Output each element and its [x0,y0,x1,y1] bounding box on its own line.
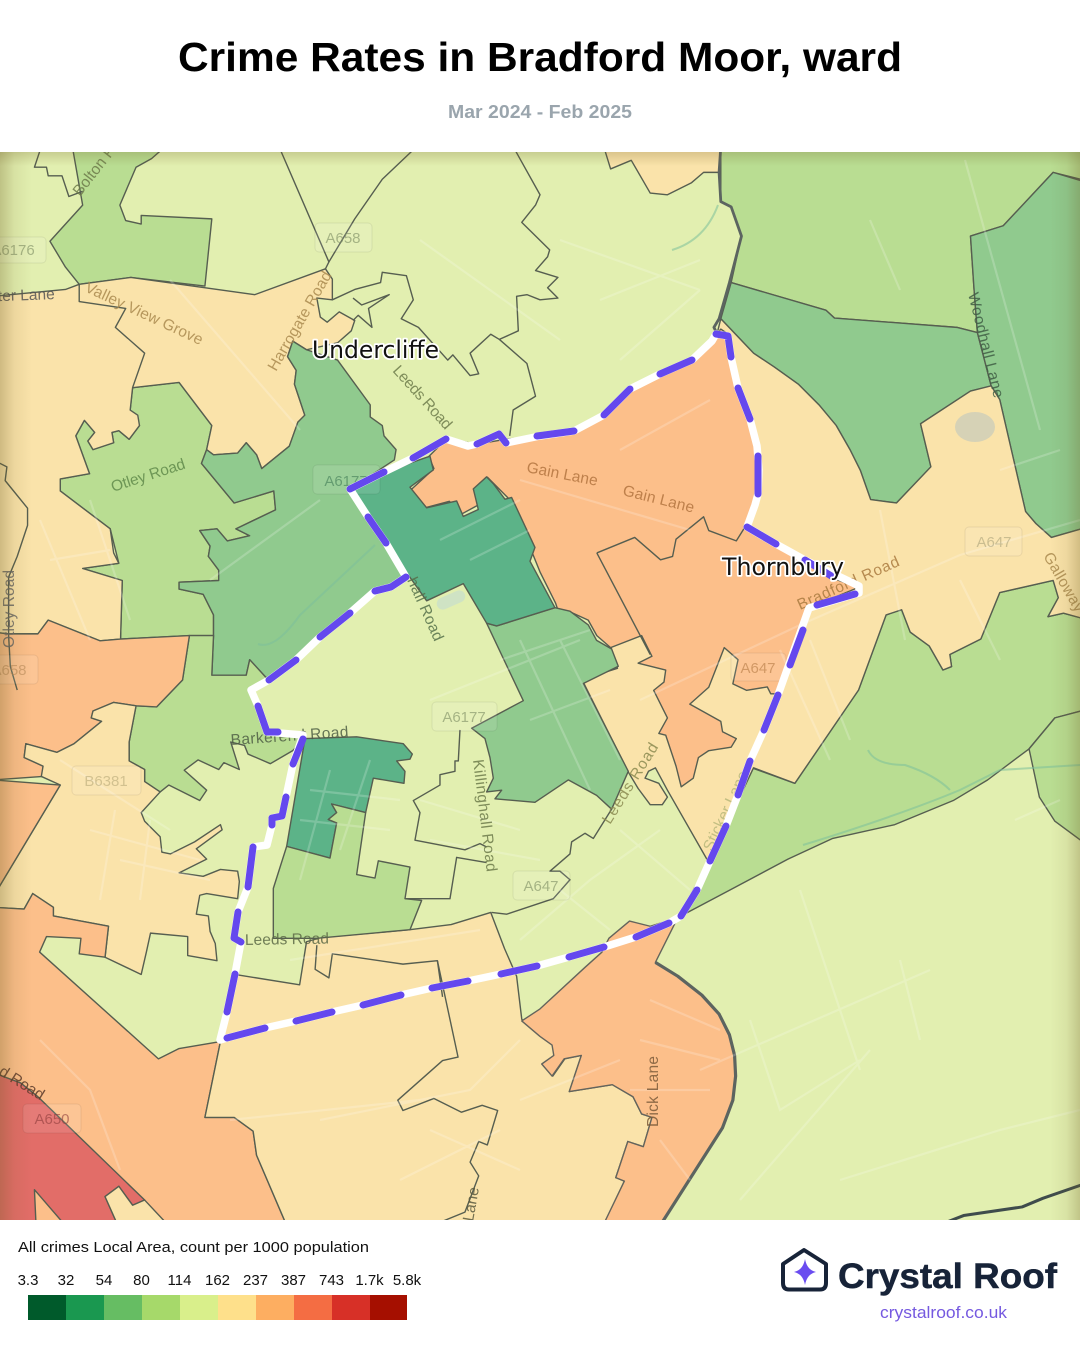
road label: Leeds Road centre: Leeds Road [599,740,662,827]
region: orange Gain Lane and Thornbury [412,329,859,787]
badge: A647 Thornbury: A647 [740,660,776,677]
legend scale values: 5.8k [393,1272,422,1289]
place label: Thornbury: Thornbury [721,553,844,581]
region: south-east green band [678,580,1080,918]
road label: Killinghall Road south: Killinghall Road [469,758,500,873]
faint roads [40,160,1080,1200]
badge: A6177 north [313,465,380,494]
badge: A647 east: A647 [976,534,1012,551]
boundary lines inside regions [0,147,745,1228]
region: high crime red [0,1073,145,1228]
region: cream east and Thornbury edge [583,319,1080,863]
badge: A6176 [0,237,46,263]
region: Barkerend green [129,636,305,801]
legend scale values: 743 [319,1272,344,1289]
road label: Killinghall Road top: hall Road [403,575,447,644]
title: Crime Rates in Bradford Moor, ward [178,34,902,80]
badge: A647 east [965,527,1022,556]
road label: Gain Lane east: Gain Lane [621,482,696,517]
river lines [258,205,1080,845]
region: cream pocket right of red [104,1186,164,1220]
region: orange west [0,620,189,780]
road label: Harrogate Road: Harrogate Road [265,269,335,374]
region: Otley Road green [60,382,276,639]
region: cream north-west [0,269,355,641]
ward white casing [220,334,859,1040]
badge: A6177 north: A6177 [324,473,368,490]
base area: low crime light green [0,152,1080,1220]
region: central mid green [472,608,628,809]
legend scale values: 1.7k [355,1272,384,1289]
legend scale values: 162 [205,1272,230,1289]
website link text: crystalroof.co.uk [880,1304,1008,1322]
legend scale values: 387 [281,1272,306,1289]
thick outer boundary lines [655,147,1080,1228]
region: north-east fields [721,147,1080,333]
badge: B6381: B6381 [84,773,128,790]
ward boundary: Bradford Moor [220,334,859,1040]
map edge vignette [0,152,1080,1220]
badge: A647 south [513,871,570,900]
subtitle: date range: Mar 2024 - Feb 2025 [448,101,632,122]
ward purple dashes [227,334,855,1038]
road label: Gain Lane west: Gain Lane [525,459,599,490]
region: dark green north of ward centre [352,456,555,626]
region: top cream pocket [604,152,719,196]
region: orange sliver west [0,780,60,897]
region: Woodhall green [970,172,1080,537]
road label: Dick Lane: Dick Lane [645,1056,662,1127]
road label: Otley Road east: Otley Road [109,456,187,496]
legend scale values: 32 [58,1272,74,1289]
badge: B6381 [72,766,141,795]
badge: A658 north: A658 [325,230,361,247]
icon: house outline [783,1250,826,1290]
road label: Otley Road west: Otley Road [1,570,18,648]
badge: A6177 centre [432,702,497,731]
region: dark green Barkerend south [287,737,412,858]
logo: Crystal Roof [783,1250,1057,1322]
badge: A650 [23,1104,81,1133]
badge: A658 west [0,655,38,684]
badge: A658 north [315,223,372,252]
legend scale values: 237 [243,1272,268,1289]
road label: Valley View Grove: Valley View Grove [82,279,206,349]
region: far east green pocket [1029,709,1080,845]
legend scale values: 54 [96,1272,112,1289]
legend title: All crimes Local Area, count per 1000 population [18,1239,369,1256]
place label: Undercliffe: Undercliffe [312,336,439,364]
legend [18,1239,422,1320]
road label: Bradford Road: Bradford Road [795,553,902,614]
road label: Woodhall Lane: Woodhall Lane [964,291,1007,400]
legend scale values: 80 [133,1272,150,1289]
pond: blue [436,590,465,610]
road label: Bolton Road: Bolton Road [70,122,136,199]
region: cream west [0,702,239,974]
road label: Leeds Road south: Leeds Road [245,931,329,949]
badge: A650: A650 [34,1111,70,1128]
region: Undercliffe mid green [179,341,405,680]
road label: south Lane: Lane [460,1186,483,1223]
legend scale values [18,1272,422,1289]
pond: grey [955,412,995,442]
region: orange south-west [0,894,288,1228]
badge: A647 Thornbury [731,653,786,681]
region: north-west green [50,147,212,286]
legend scale values: 3.3 [18,1272,38,1289]
region: cream south [205,912,652,1228]
icon: crystal star [794,1259,816,1285]
region: light mid green below [273,804,422,938]
legend colour bar [28,1295,407,1320]
badge: A6177 centre: A6177 [442,709,486,726]
logo wordmark: Crystal Roof [838,1257,1057,1296]
road label: Sticker Lane: Sticker Lane [700,768,752,854]
legend scale values: 114 [168,1272,191,1289]
region: east green centre [721,283,991,503]
region: orange south-east with thick edge [522,918,736,1228]
badge: A647 south: A647 [523,878,559,895]
road label: Barkerend Road: Barkerend Road [230,724,349,749]
road label: Leeds Road north: Leeds Road [389,362,455,433]
